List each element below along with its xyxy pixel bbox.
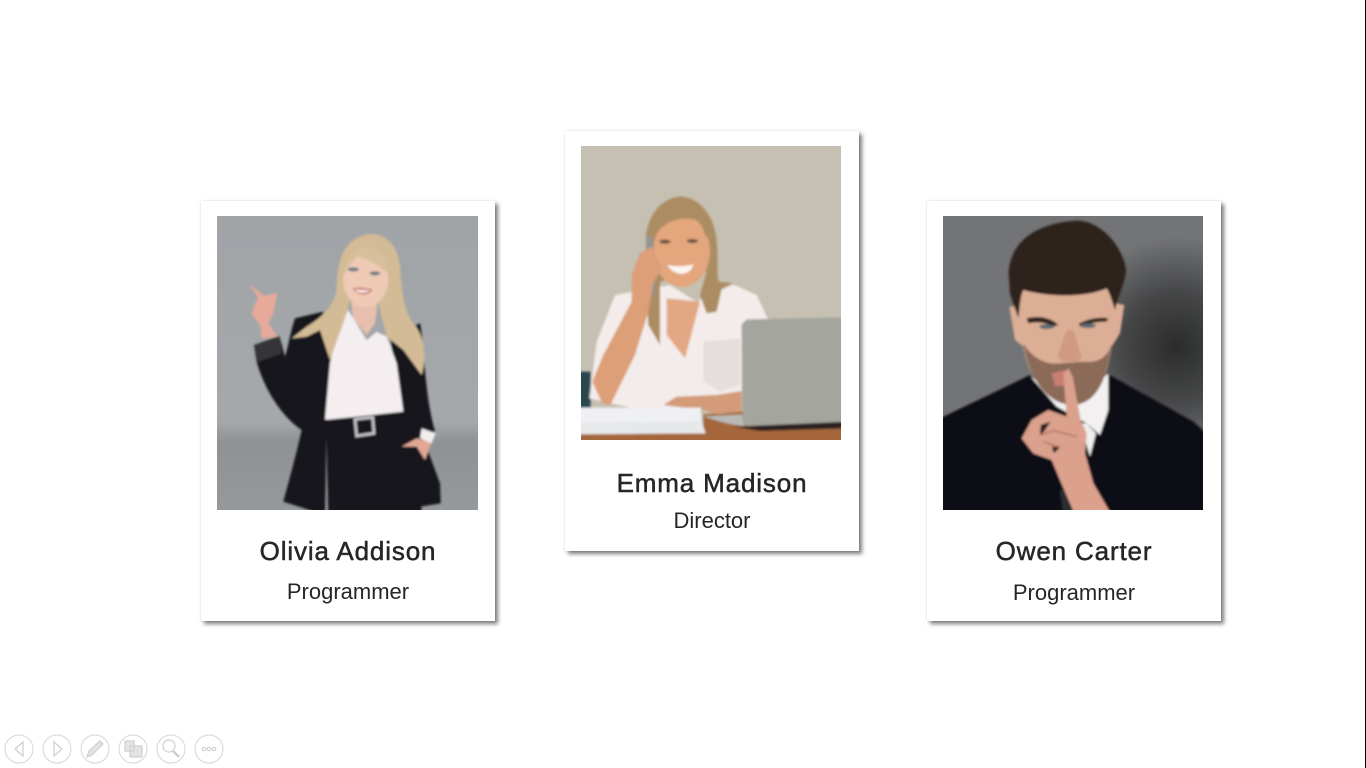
icon: pen xyxy=(81,735,109,763)
icon: slides xyxy=(119,735,147,763)
icon: more xyxy=(195,735,223,763)
role: Director xyxy=(673,508,750,533)
panel: Owen Carter card xyxy=(927,201,1221,621)
name: Emma Madison xyxy=(617,468,807,498)
icon: next xyxy=(43,735,71,763)
photo: man in suit with finger to lips xyxy=(943,216,1203,510)
name: Owen Carter xyxy=(996,536,1152,566)
name: Olivia Addison xyxy=(260,536,436,566)
icon: previous xyxy=(5,735,33,763)
panel: Olivia Addison card xyxy=(201,201,495,621)
slideshow navigation controls xyxy=(4,734,224,764)
photo: woman in black blazer pointing xyxy=(217,216,478,510)
photo: woman on phone at desk with laptop xyxy=(581,146,841,440)
right window edge line xyxy=(1365,0,1366,768)
icon: zoom xyxy=(157,735,185,763)
panel: Emma Madison card xyxy=(565,131,859,551)
role: Programmer xyxy=(287,579,409,604)
role: Programmer xyxy=(1013,580,1135,605)
